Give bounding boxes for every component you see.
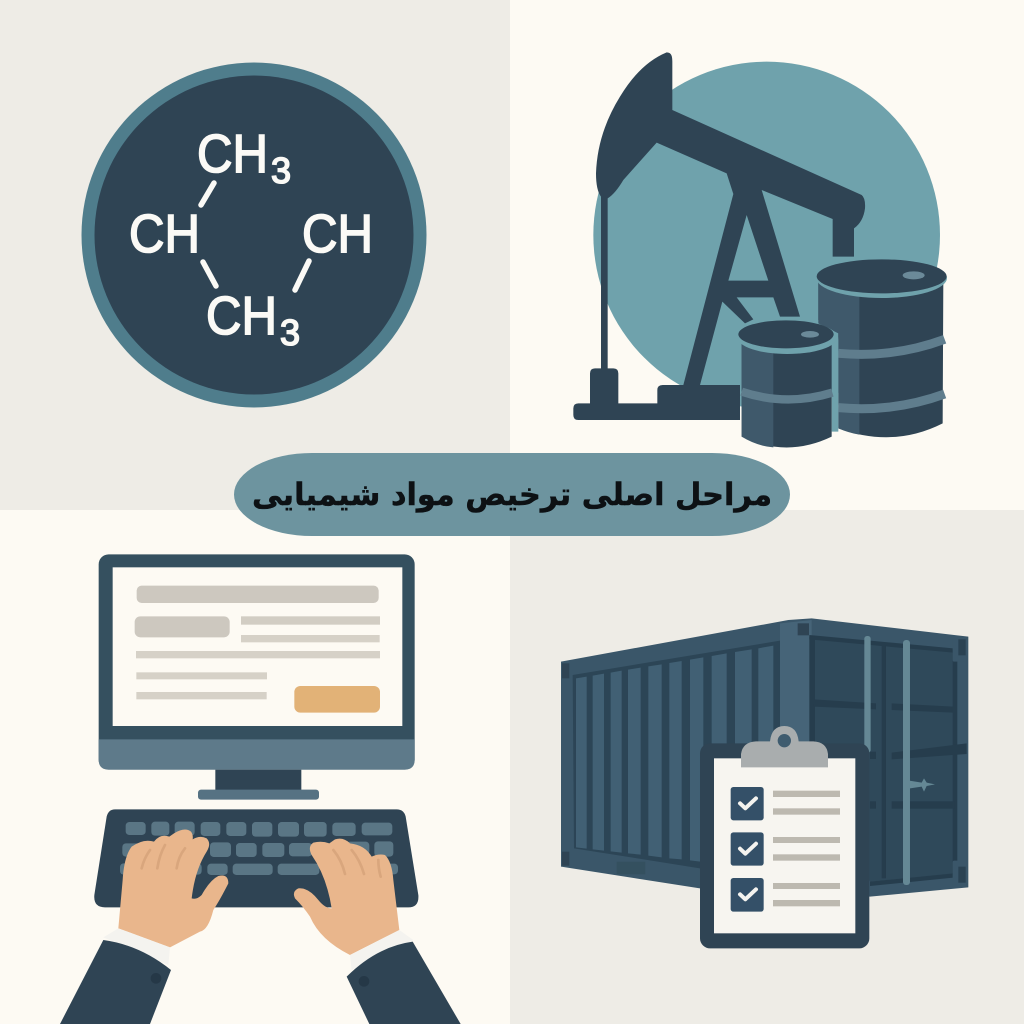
title text: مراحل اصلی ترخیص مواد شیمیایی xyxy=(252,477,772,513)
checklist rows xyxy=(731,787,840,912)
molecule formula text: CH xyxy=(302,204,373,264)
molecule formula text: CH xyxy=(206,286,277,346)
corrugation ribs xyxy=(576,646,773,870)
molecule formula text: 3 xyxy=(280,312,300,353)
left cuff and sleeve xyxy=(60,928,171,1024)
icon: keyboard and hands xyxy=(60,809,461,1024)
molecule formula text: 3 xyxy=(271,150,291,191)
teal circle backdrop xyxy=(593,62,940,408)
right cuff and sleeve xyxy=(347,930,461,1024)
panel: chemical molecule xyxy=(82,62,426,408)
icon: container xyxy=(561,618,968,897)
keys xyxy=(120,822,398,875)
icon: monitor xyxy=(99,554,415,800)
left hand xyxy=(118,830,228,947)
right hand xyxy=(294,839,399,955)
molecule formula text xyxy=(129,124,373,353)
icon: pumpjack xyxy=(573,52,865,420)
panel: computer and hands xyxy=(60,554,461,1024)
panel: oil pump and barrels xyxy=(573,52,947,447)
container doors xyxy=(814,638,955,882)
clipboard clip xyxy=(741,726,828,767)
molecule formula text: CH xyxy=(129,204,200,264)
icon: small barrel xyxy=(737,320,838,447)
screen content xyxy=(113,567,402,726)
title pill xyxy=(234,453,790,536)
icon: large barrel xyxy=(816,258,947,437)
molecule formula text: CH xyxy=(197,124,268,184)
panel: shipping container and checklist xyxy=(561,618,968,948)
icon: clipboard checklist xyxy=(700,726,869,948)
